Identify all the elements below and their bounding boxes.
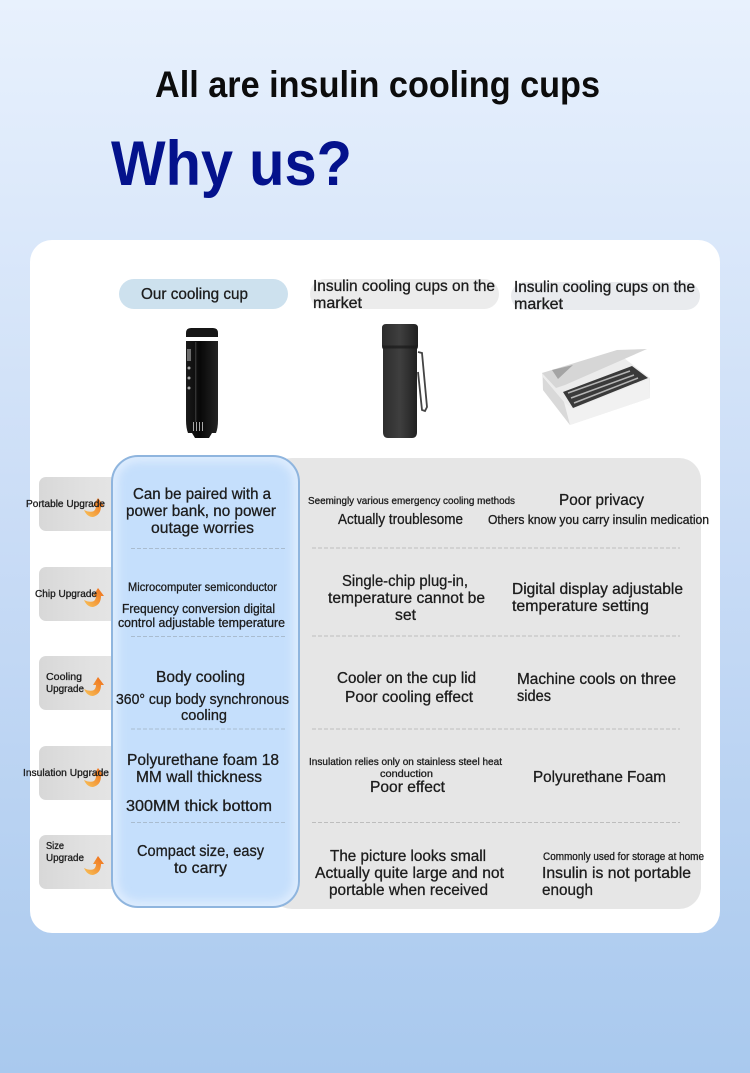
icon: upgrade arrow (84, 677, 104, 696)
row 1 our text: power bank, no power (126, 503, 277, 520)
row 5 our text (137, 843, 264, 877)
row 1 our text: outage worries (151, 520, 254, 537)
label: size upgrade (46, 840, 84, 864)
row 5 our text: to carry (174, 860, 227, 877)
row 5 competitor text: Commonly used for storage at home (543, 851, 704, 863)
row 3 our text: 360° cup body synchronous (116, 691, 289, 708)
product image: our cooling cup (186, 328, 218, 438)
row 5 competitor text: Actually quite large and not (315, 865, 505, 882)
label: insulation upgrade: Insulation Upgrade (23, 767, 109, 779)
row 1 our text: Can be paired with a (133, 486, 271, 503)
label: portable upgrade: Portable Upgrade (26, 498, 105, 510)
column header: market cups one: Insulin cooling cups on the (313, 278, 495, 295)
title: All are insulin cooling cups (155, 64, 600, 105)
upgrade tab: chip (39, 567, 129, 621)
row 5 our text: Compact size, easy (137, 843, 264, 860)
column header: market cups two: market (514, 296, 564, 313)
row 1 competitor text: Actually troublesome (338, 512, 463, 528)
row 1 competitor text: Others know you carry insulin medication (488, 513, 709, 527)
column header: market cups one: market (313, 295, 363, 312)
row 4 our text: MM wall thickness (136, 769, 262, 786)
label: chip upgrade: Chip Upgrade (35, 588, 97, 600)
upgrade tab: cooling (39, 656, 129, 710)
column header: our cooling cup (119, 279, 288, 309)
label: cooling upgrade (46, 671, 84, 695)
icon: upgrade arrow (84, 588, 104, 607)
row 4 competitor text: Polyurethane Foam (533, 769, 666, 786)
label: cooling upgrade: Cooling (46, 671, 82, 683)
label: size upgrade: Upgrade (46, 852, 84, 864)
label: cooling upgrade: Upgrade (46, 683, 84, 695)
row 3 competitor text: Machine cools on three (517, 671, 676, 688)
icon: upgrade arrow (84, 856, 104, 875)
row 4 competitor text: Insulation relies only on stainless steel heat (309, 756, 502, 768)
row 2 competitor text: Digital display adjustable (512, 581, 683, 598)
row 2 our text (118, 580, 285, 630)
row 5 competitor text: The picture looks small (330, 848, 486, 865)
product image: black flask (382, 324, 427, 438)
row 5 competitor text: enough (542, 882, 593, 899)
row 3 competitor text: sides (517, 688, 551, 705)
column header: our cooling cup: Our cooling cup (141, 286, 248, 303)
row 3 our text: Body cooling (156, 669, 245, 686)
row 3 competitor text: Poor cooling effect (345, 689, 474, 706)
row 5 competitor text: Insulin is not portable (542, 865, 691, 882)
row 2 competitor text (328, 573, 683, 624)
panel: comparison card (23, 240, 720, 933)
upgrade tab: insulation (39, 746, 129, 800)
row 4 competitor text: Poor effect (370, 779, 446, 796)
row 5 competitor text: portable when received (329, 882, 488, 899)
row 2 competitor text: temperature cannot be (328, 590, 485, 607)
row 3 competitor text: Cooler on the cup lid (337, 670, 476, 687)
row 4 competitor text (309, 756, 666, 796)
row 2 competitor text: set (395, 607, 417, 624)
upgrade tab: size (39, 835, 129, 889)
icon: upgrade arrow (84, 768, 104, 787)
row 2 our text: control adjustable temperature (118, 616, 285, 630)
row 1 our text (126, 486, 277, 537)
row 4 competitor text: conduction (380, 768, 433, 780)
row 2 competitor text: temperature setting (512, 598, 649, 615)
row 1 competitor text: Seemingly various emergency cooling methods (308, 495, 515, 507)
row 2 our text: Frequency conversion digital (122, 602, 275, 616)
row 2 competitor text: Single-chip plug-in, (342, 573, 468, 590)
panel: our cooling cup highlights (112, 456, 299, 907)
row 1 competitor text: Poor privacy (559, 492, 644, 509)
column header: market cups two: Insulin cooling cups on the (514, 279, 695, 296)
product image: insulin cooling box (542, 349, 650, 425)
column header: market cups two (511, 279, 700, 313)
row 3 our text (116, 669, 289, 724)
row 3 our text: cooling (181, 707, 227, 724)
row 5 competitor text (315, 848, 704, 899)
upgrade tab: portable (39, 477, 129, 531)
panel: competitor comparison (270, 458, 709, 909)
row 4 our text: 300MM thick bottom (126, 798, 272, 815)
icon: upgrade arrow (84, 498, 104, 517)
label: size upgrade: Size (46, 840, 64, 852)
heading: why us: Why us? (111, 129, 352, 199)
row 1 competitor text (308, 492, 709, 528)
row 4 our text: Polyurethane foam 18 (127, 752, 279, 769)
row 4 our text (126, 752, 279, 815)
column header: market cups one (310, 278, 499, 312)
row 2 our text: Microcomputer semiconductor (128, 580, 277, 594)
row 3 competitor text (337, 670, 676, 706)
